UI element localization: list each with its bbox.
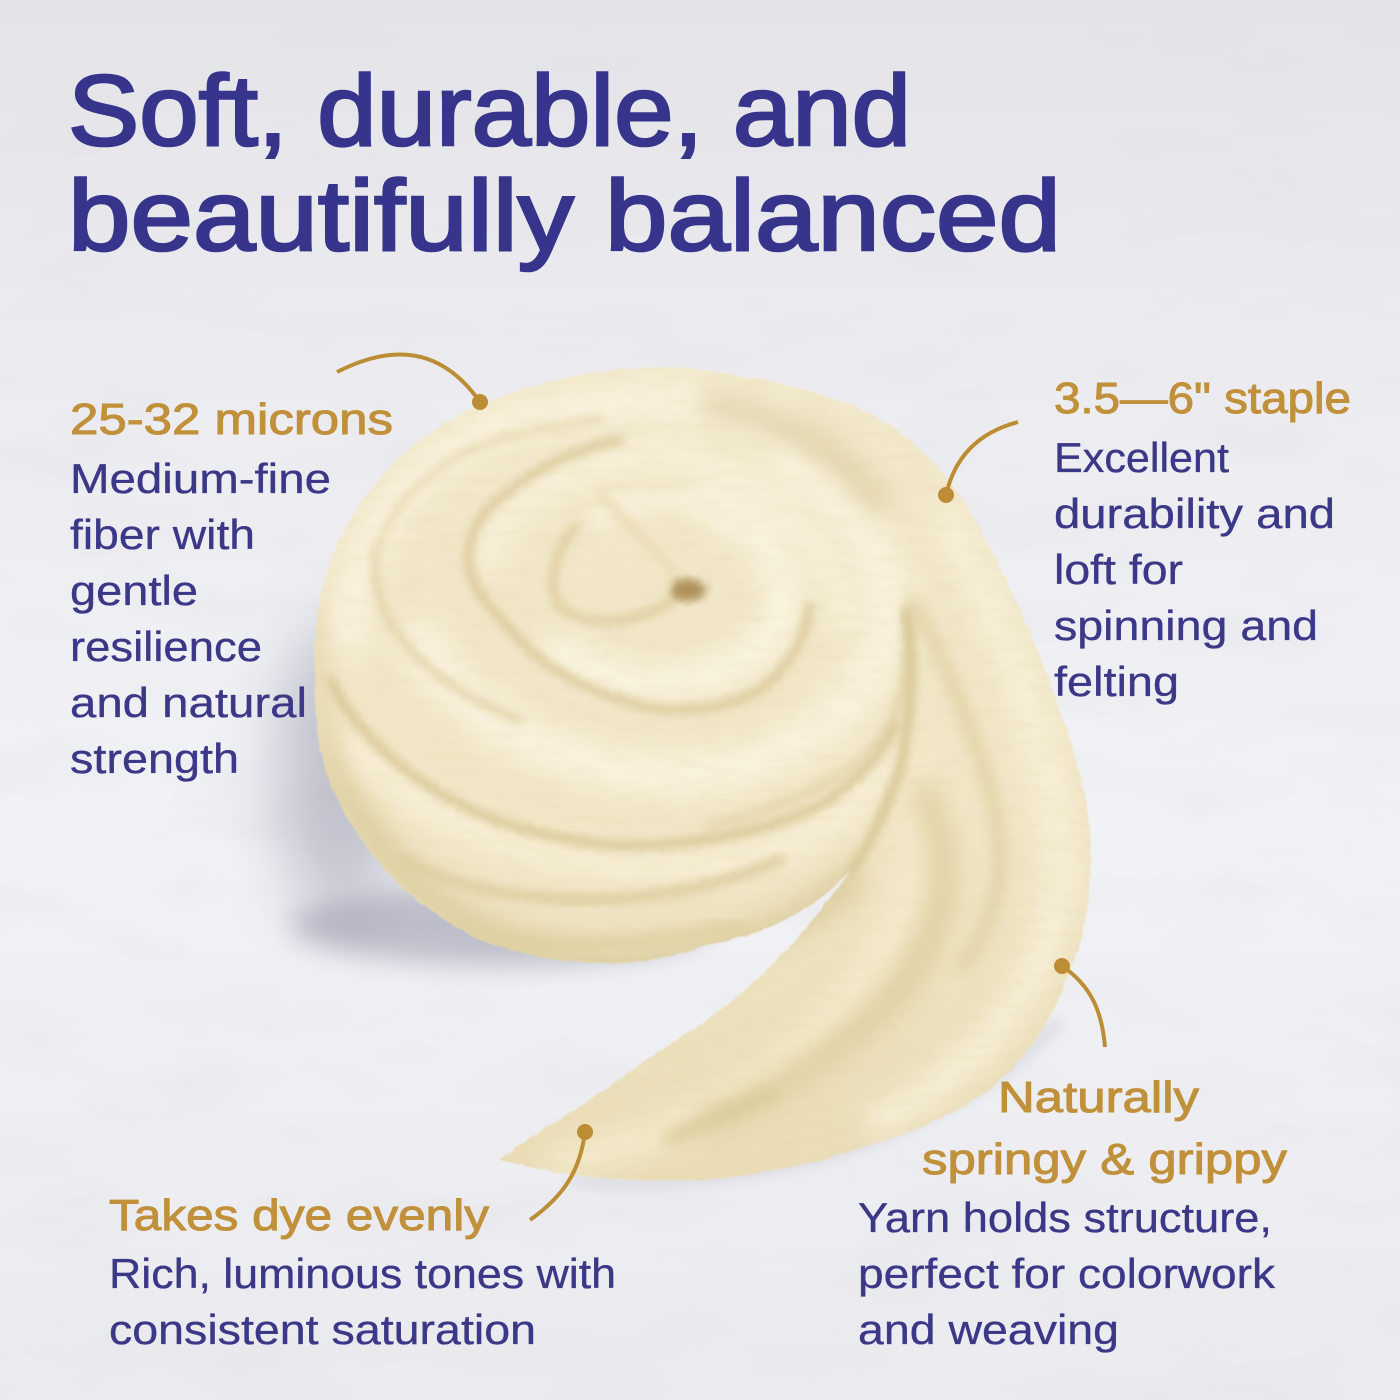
title: beautifully balanced (68, 160, 1061, 272)
callout: dye: consistent saturation (109, 1306, 536, 1353)
leader: springy (1054, 958, 1105, 1047)
leader: dye (530, 1124, 593, 1220)
callout: microns: 25-32 microns (70, 395, 393, 444)
title (68, 55, 1061, 272)
callout: microns: resilience (70, 623, 262, 670)
callout: staple: Excellent (1054, 434, 1229, 481)
center hole (670, 579, 706, 601)
callout: microns: Medium-fine (70, 455, 331, 502)
crease: lower band (402, 859, 780, 900)
callout: dye: Takes dye evenly (109, 1191, 489, 1240)
callout: staple: loft for (1054, 546, 1183, 593)
callout: dye (109, 1191, 616, 1353)
callout: microns (70, 395, 393, 782)
leader: microns (337, 354, 488, 410)
leader: staple (938, 422, 1018, 503)
lower volume shading (330, 760, 850, 965)
callout: dye: Rich, luminous tones with (109, 1250, 616, 1297)
crease: top band shadow (710, 405, 880, 505)
callout: staple: durability and (1054, 490, 1335, 537)
callout: springy: and weaving (858, 1306, 1119, 1353)
crease: inner tuft (553, 527, 686, 621)
title: Soft, durable, and (68, 55, 911, 167)
callout: microns: strength (70, 735, 239, 782)
fiber grain (345, 394, 856, 770)
callout: staple: spinning and (1054, 602, 1318, 649)
callout: staple (1054, 374, 1351, 705)
callout: springy: Yarn holds structure, (858, 1194, 1272, 1241)
callout: springy: Naturally (998, 1073, 1199, 1122)
callout: springy: springy & grippy (922, 1135, 1287, 1184)
callout: springy (858, 1073, 1287, 1353)
callout: microns: fiber with (70, 511, 255, 558)
callout: staple: 3.5—6" staple (1054, 374, 1351, 423)
crease: tail (851, 610, 911, 870)
bright strand highlights (350, 402, 780, 640)
callout: springy: perfect for colorwork (858, 1250, 1276, 1297)
callout: staple: felting (1054, 658, 1179, 705)
crease: around main coil (710, 618, 908, 825)
crease: between coil and lower band (331, 682, 895, 845)
wool roving swirl (300, 350, 1100, 1190)
callout: microns: gentle (70, 567, 198, 614)
crease: around inner coil (468, 440, 810, 710)
callout: microns: and natural (70, 679, 307, 726)
shadow under wool (280, 620, 1060, 1183)
